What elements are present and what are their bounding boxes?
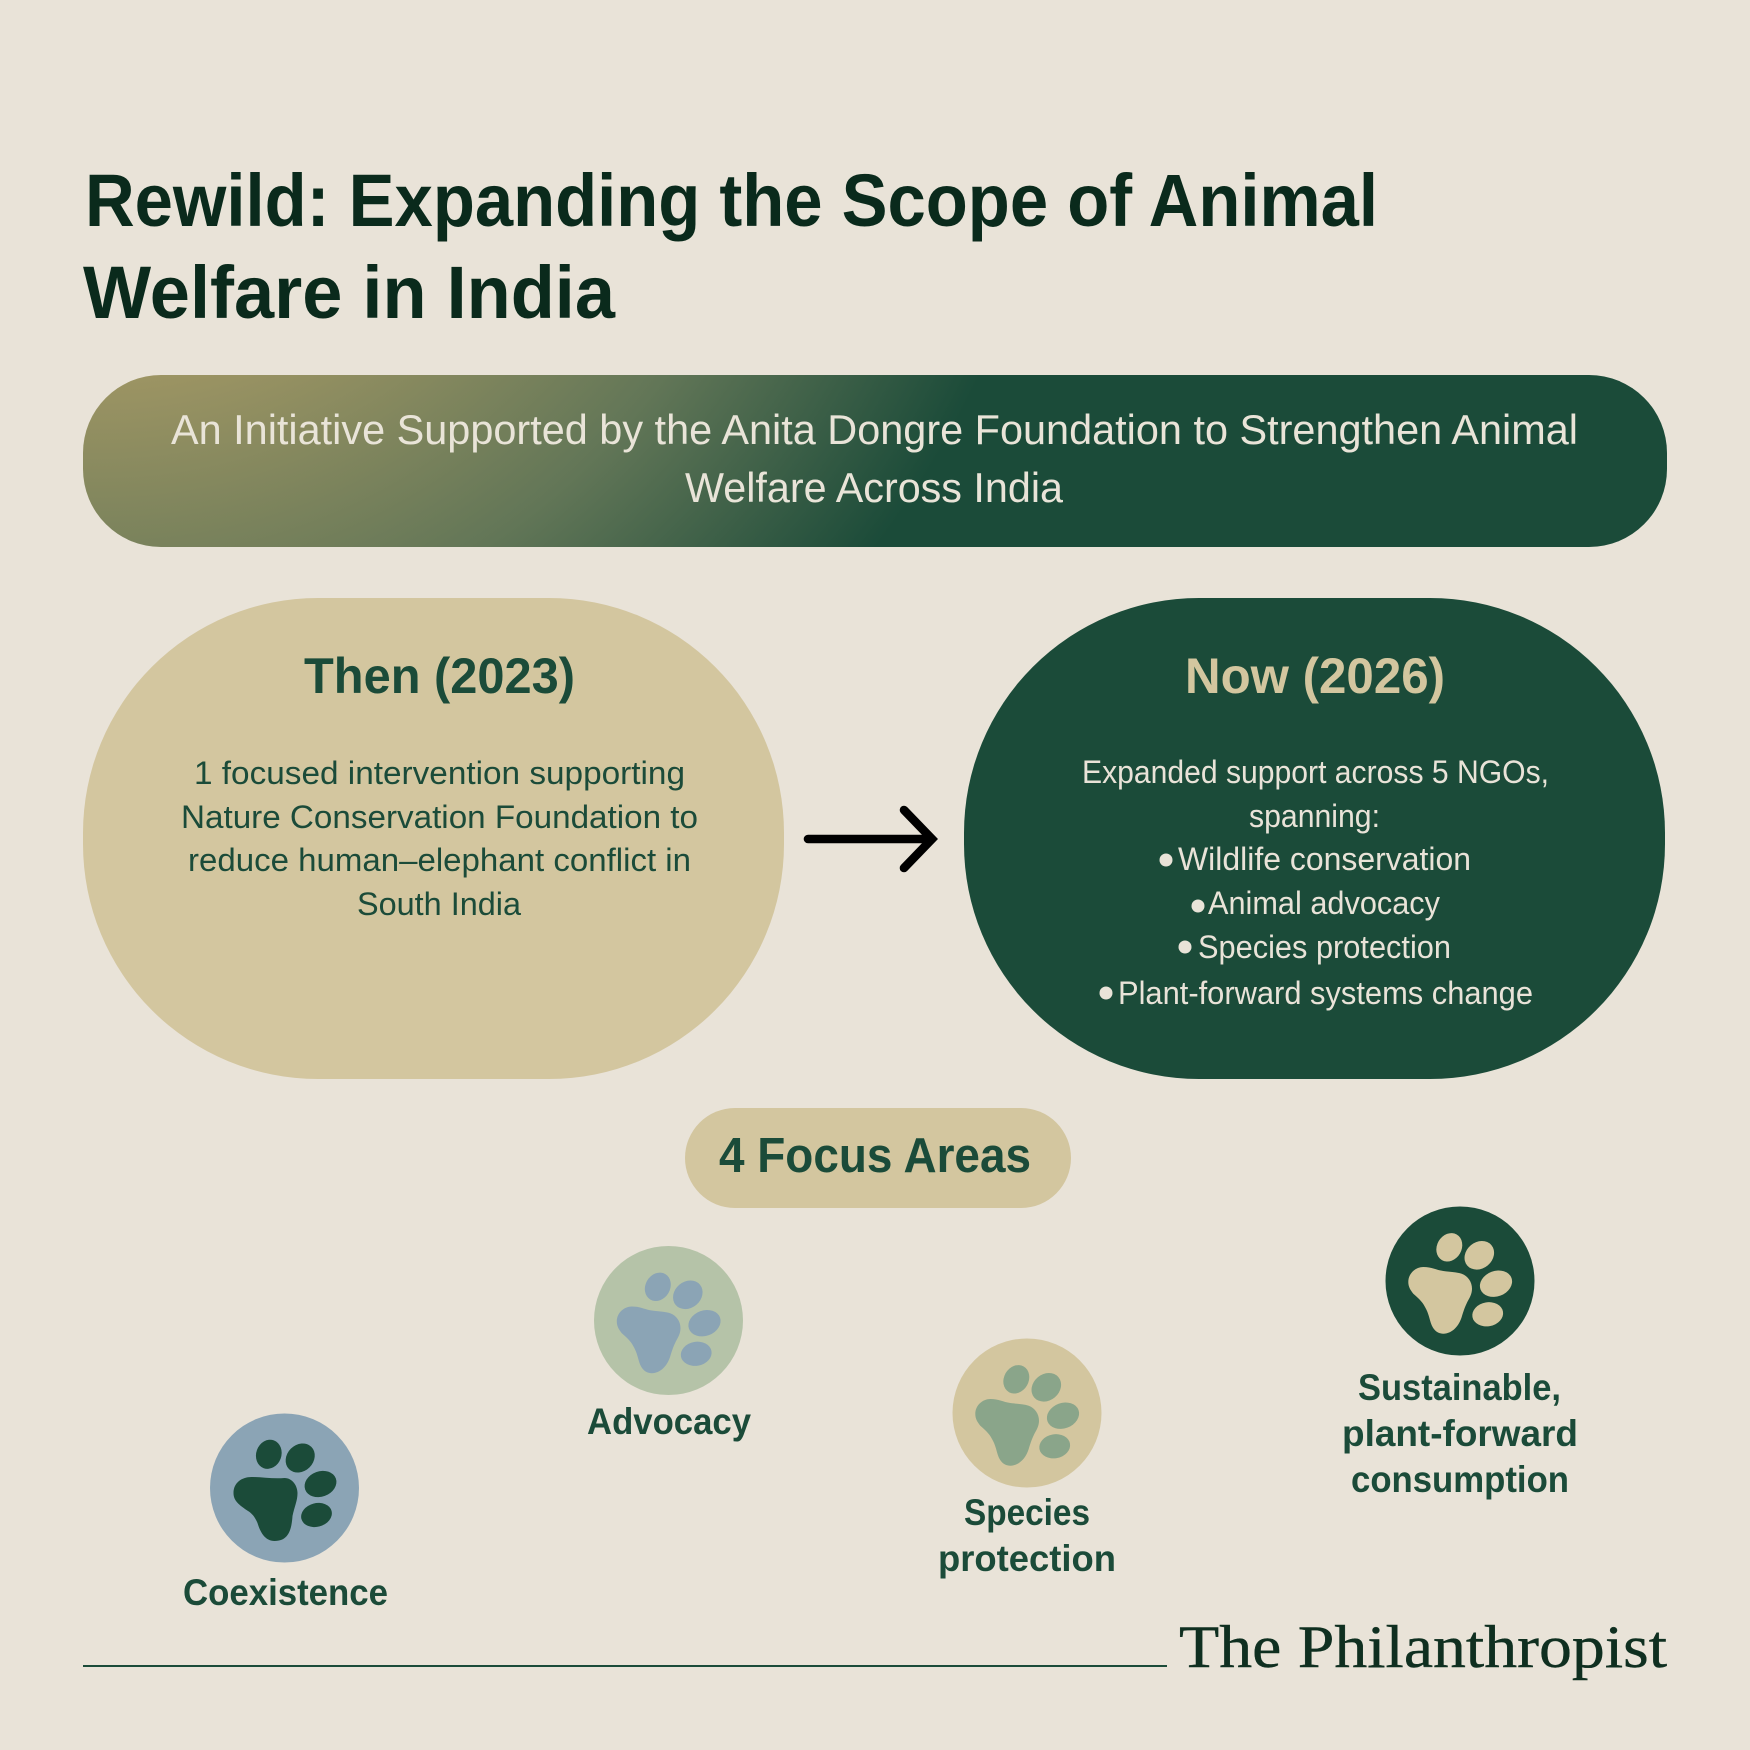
title: Welfare in India	[83, 251, 616, 334]
panel: now (2026): Expanded support across 5 NGOs,	[1082, 754, 1549, 790]
label: species protection	[938, 1492, 1116, 1579]
label: species protection: protection	[938, 1538, 1116, 1579]
panel: now (2026): Wildlife conservation	[1178, 841, 1471, 877]
banner: initiative subtitle	[83, 375, 1667, 547]
icon: sustainable consumption paw	[1386, 1206, 1534, 1356]
icon: advocacy paw	[594, 1246, 743, 1395]
heading: 4 focus areas	[685, 1108, 1071, 1208]
brand: the philanthropist: The Philanthropist	[1179, 1614, 1667, 1680]
label: coexistence: Coexistence	[183, 1572, 388, 1613]
panel: then (2023): Nature Conservation Foundation to	[181, 799, 698, 835]
icon: species protection paw	[952, 1338, 1102, 1488]
label: sustainable plant-forward consumption: consumption	[1351, 1459, 1569, 1500]
label: advocacy: Advocacy	[587, 1401, 751, 1442]
label: sustainable plant-forward consumption: plant-forward	[1342, 1413, 1578, 1454]
title	[83, 159, 1378, 334]
label: species protection: Species	[964, 1492, 1090, 1533]
panel: then (2023): South India	[357, 886, 521, 922]
panel: now (2026): Animal advocacy	[1208, 885, 1440, 921]
banner: initiative subtitle: Welfare Across India	[685, 464, 1064, 511]
panel: then (2023): reduce human–elephant conflict in	[188, 842, 691, 878]
arrow: then to now	[808, 810, 932, 868]
label: sustainable plant-forward consumption: Sustainable,	[1358, 1367, 1561, 1408]
banner: initiative subtitle: An Initiative Supported by the Anita Dongre Foundation to Strengthen Animal	[171, 406, 1578, 453]
label: sustainable plant-forward consumption	[1342, 1367, 1578, 1500]
title: Rewild: Expanding the Scope of Animal	[85, 159, 1378, 242]
panel: now (2026)	[964, 598, 1665, 1079]
panel: then (2023)	[83, 598, 784, 1079]
panel: now (2026): spanning:	[1249, 798, 1380, 834]
panel: now (2026): Species protection	[1198, 929, 1451, 965]
icon: coexistence paw	[210, 1414, 359, 1562]
footer rule	[83, 1665, 1167, 1667]
panel: then (2023): Then (2023)	[304, 648, 575, 704]
panel: now (2026): Plant-forward systems change	[1118, 975, 1533, 1011]
heading: 4 focus areas: 4 Focus Areas	[719, 1129, 1031, 1183]
panel: then (2023): 1 focused intervention supporting	[194, 755, 685, 791]
panel: now (2026): Now (2026)	[1185, 648, 1445, 704]
